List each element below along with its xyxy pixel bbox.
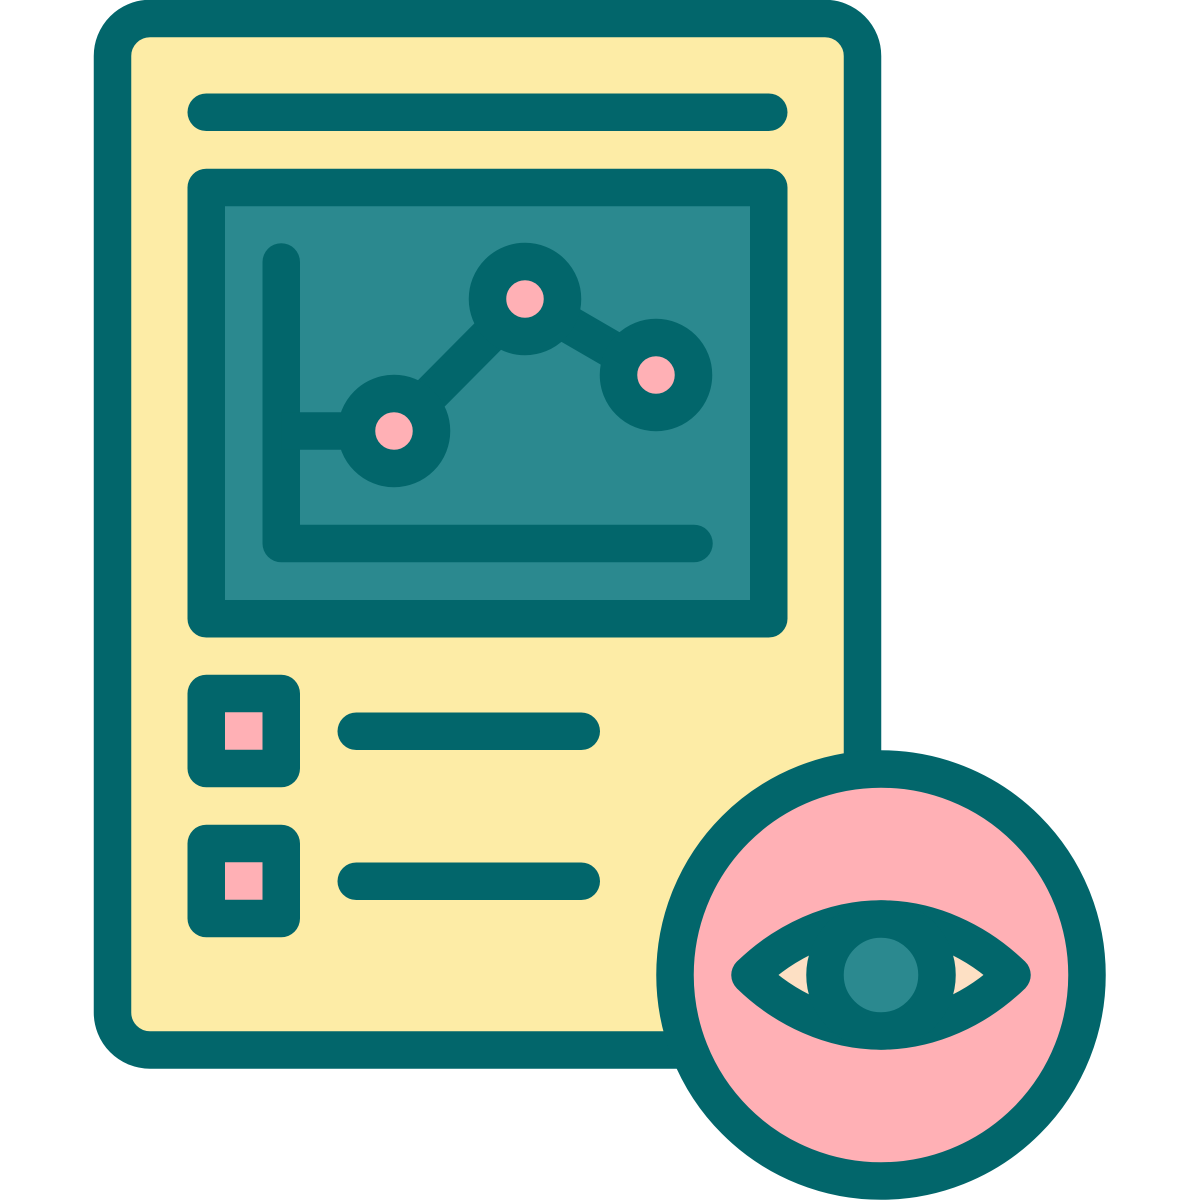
panel: chart	[206, 188, 769, 619]
list item 2	[206, 844, 600, 918]
chart axes	[281, 262, 694, 544]
chart connector lines	[281, 299, 656, 431]
magnifier circle	[675, 769, 1087, 1181]
panel: document page	[112, 18, 862, 1050]
data point 3	[618, 338, 694, 412]
eye iris	[825, 919, 937, 1031]
icon: eye	[750, 919, 1012, 1031]
data point 1	[356, 394, 432, 468]
data point 2	[488, 262, 562, 336]
heading line	[188, 94, 788, 131]
list item 1	[206, 694, 600, 768]
